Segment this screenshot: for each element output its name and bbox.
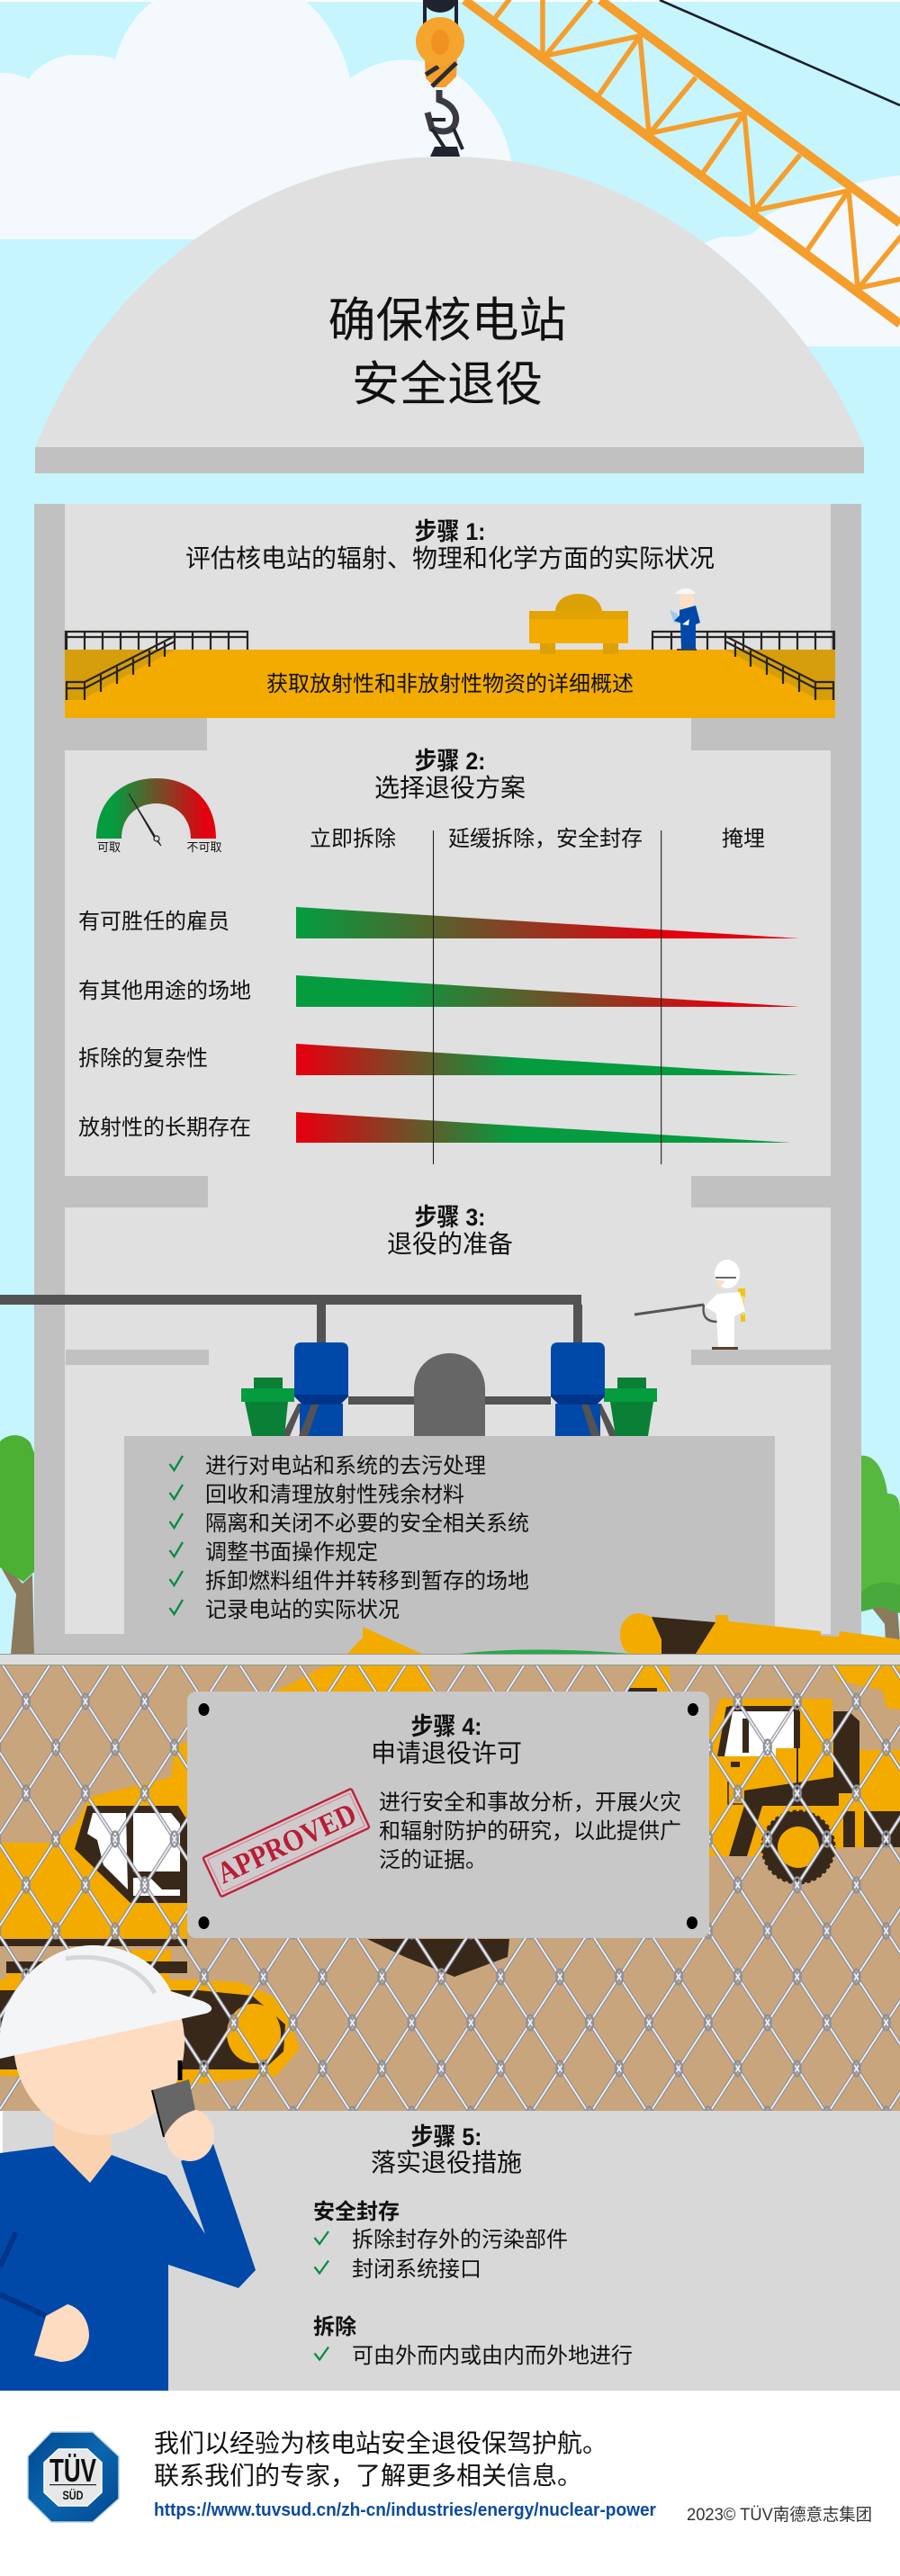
- step 4 body text: 和辐射防护的研究，以此提供广: [379, 1819, 681, 1844]
- step 5 heading: [371, 2123, 522, 2177]
- safe storage list: 拆除封存外的污染部件: [352, 2228, 568, 2252]
- wedge: long term radioactivity: [78, 1112, 791, 1143]
- worker on phone: [0, 1945, 256, 2391]
- column headers: 掩埋: [722, 827, 765, 851]
- tree: left: [0, 1435, 36, 1654]
- phone: [152, 2060, 195, 2137]
- shirt creases: [0, 2232, 46, 2316]
- panel: step 5: [3, 2111, 900, 2391]
- step 2 heading: 步骤 2:: [414, 748, 486, 775]
- link: https://www.tuvsud.cn/zh-cn/industries/energy/nuclear-power: [154, 2500, 656, 2520]
- wedge: alternative site use: [78, 975, 800, 1007]
- step 4 body text: 进行安全和事故分析，开展火灾: [379, 1791, 681, 1815]
- hand holding phone: [166, 2109, 214, 2161]
- wedge: long term radioactivity: 放射性的长期存在: [78, 1116, 251, 1140]
- step 4 body text: [379, 1791, 681, 1872]
- column headers: [310, 827, 765, 851]
- panel: step 3: [0, 1204, 775, 1634]
- pipework: [0, 1295, 617, 1436]
- wedge: alternative site use: 有其他用途的场地: [78, 979, 251, 1003]
- TÜV SÜD logo: SÜD: [63, 2488, 83, 2502]
- step 5 heading: 步骤 5:: [410, 2123, 482, 2150]
- closing statement: 联系我们的专家，了解更多相关信息。: [154, 2462, 582, 2490]
- orange platform: [65, 650, 835, 718]
- checklist item 1: 进行对电站和系统的去污处理: [205, 1454, 486, 1478]
- step 5 heading: 落实退役措施: [371, 2149, 522, 2177]
- icon: cart: [529, 594, 628, 654]
- cloud: left: [0, 0, 514, 239]
- TÜV SÜD logo: TÜV: [50, 2452, 96, 2489]
- checklist panel: [124, 1436, 775, 1634]
- gauge: 可取: [97, 840, 121, 854]
- step 4 heading: 步骤 4:: [410, 1713, 482, 1740]
- column headers: 延缓拆除，安全封存: [448, 827, 643, 851]
- panel: step 4 sign: [187, 1692, 709, 1938]
- sign screws: [198, 1703, 698, 1929]
- building interior: [65, 504, 831, 1634]
- chain-link fence: [0, 1665, 900, 2111]
- step 1 heading: [185, 518, 715, 572]
- dome: [36, 157, 864, 447]
- building shell: [34, 504, 861, 1654]
- blue tanks: [294, 1342, 605, 1436]
- wedge: competent staff: [78, 907, 799, 938]
- safe storage list: [313, 2200, 568, 2282]
- dismantling list: 拆除: [313, 2315, 356, 2339]
- checklist item 6: 记录电站的实际状况: [205, 1598, 400, 1622]
- excavator right behind fence: [275, 1665, 900, 1977]
- step 1 heading: 评估核电站的辐射、物理和化学方面的实际状况: [185, 544, 715, 572]
- excavator left behind fence: [0, 1742, 300, 2085]
- column headers: 立即拆除: [310, 827, 396, 851]
- step 4 heading: 申请退役许可: [371, 1739, 522, 1767]
- floor beams: [65, 718, 831, 1365]
- closing statement: 我们以经验为核电站安全退役保驾护航。: [154, 2429, 608, 2457]
- tree: right: [855, 1456, 900, 1642]
- sky background: [0, 0, 900, 1654]
- safe storage list: 封闭系统接口: [352, 2257, 482, 2282]
- copyright: 2023© TÜV南德意志集团: [687, 2505, 872, 2525]
- wedge: dismantling complexity: [78, 1044, 800, 1075]
- safe storage list: 安全封存: [313, 2200, 400, 2224]
- icon: decontamination worker with sprayer: [634, 1260, 745, 1350]
- platform stair wells and railings: [65, 632, 835, 700]
- checklist item 5: 拆卸燃料组件并转移到暂存的场地: [205, 1569, 529, 1593]
- closing statement: [154, 2429, 608, 2490]
- shirt: [0, 2144, 256, 2391]
- crane boom: [464, 0, 900, 324]
- title: 确保核电站: [328, 294, 567, 347]
- panel: step 2: [78, 748, 800, 1164]
- green filter tanks: [241, 1378, 657, 1436]
- dismantling list: 可由外而内或由内而外地进行: [352, 2344, 633, 2368]
- face: [14, 1950, 184, 2135]
- cloud: right: [630, 175, 900, 346]
- step 3 heading: 退役的准备: [387, 1230, 513, 1258]
- step 3 heading: [387, 1204, 513, 1258]
- step 2 heading: [374, 748, 526, 802]
- step 4 heading: [371, 1713, 522, 1767]
- step 2 heading: 选择退役方案: [374, 774, 526, 802]
- icon: inspector with clipboard: [670, 588, 700, 651]
- lower hand: [34, 2304, 89, 2362]
- dismantling list: [313, 2315, 633, 2368]
- excavator arm over wall: [347, 1613, 900, 1654]
- neck: [54, 2114, 112, 2184]
- wall coping: [0, 1654, 900, 1665]
- checklist item 4: 调整书面操作规定: [205, 1540, 378, 1565]
- checklist item 3: 隔离和关闭不必要的安全相关系统: [205, 1512, 529, 1536]
- checklist item 2: 回收和清理放射性残余材料: [205, 1483, 464, 1507]
- hard hat: [0, 1945, 212, 2059]
- step 1 heading: 步骤 1:: [414, 518, 486, 545]
- gauge: [96, 778, 222, 854]
- fence background: [0, 1665, 900, 2111]
- crane hook: [416, 0, 464, 157]
- step 3 heading: 步骤 3:: [414, 1204, 486, 1231]
- gauge: 不可取: [186, 840, 222, 854]
- TÜV SÜD logo: [28, 2432, 119, 2522]
- footer: [28, 2429, 872, 2525]
- step 4 body text: 泛的证据。: [379, 1848, 487, 1872]
- title: 安全退役: [352, 358, 543, 411]
- dome base slab: [35, 447, 864, 473]
- reactor vessel: [414, 1353, 485, 1436]
- crane cable: [660, 0, 900, 105]
- wedge chart: [78, 830, 800, 1164]
- step 1 platform caption: 获取放射性和非放射性物资的详细概述: [266, 672, 634, 696]
- title: [328, 294, 567, 411]
- panel: step 1: [65, 518, 835, 718]
- wedge: competent staff: 有可胜任的雇员: [78, 910, 230, 934]
- approved stamp: APPROVED: [212, 1798, 362, 1890]
- wedge: dismantling complexity: 拆除的复杂性: [78, 1046, 208, 1071]
